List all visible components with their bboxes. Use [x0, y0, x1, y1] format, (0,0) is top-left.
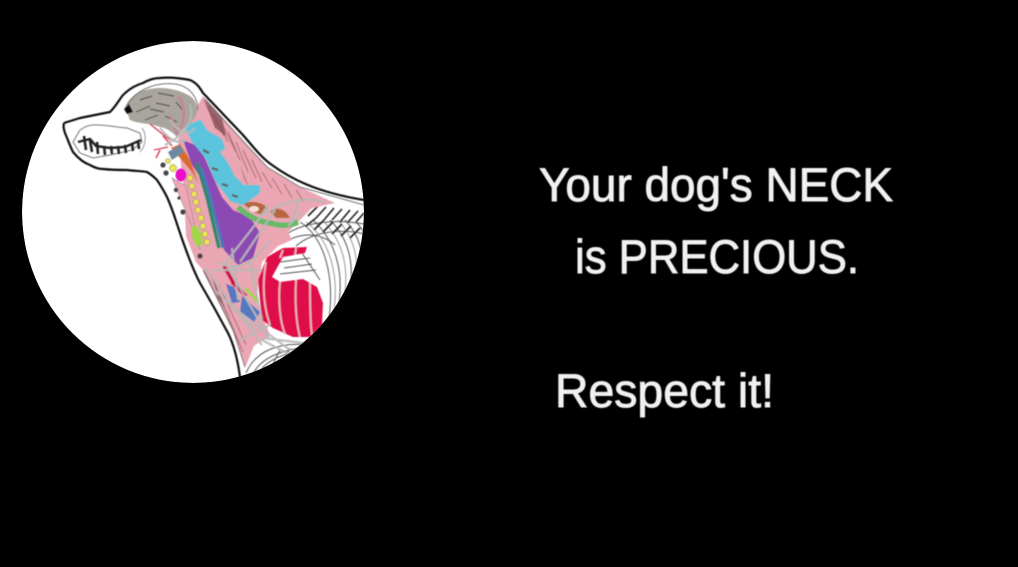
call to action: respect it: Respect it!	[555, 364, 774, 417]
purple muscle	[183, 140, 260, 265]
neck muscles	[178, 96, 335, 368]
dark nodes	[160, 162, 203, 259]
heading: neck is precious: is PRECIOUS.	[575, 230, 859, 283]
grey fascia strands	[160, 105, 325, 360]
inner outline	[127, 84, 364, 367]
brown muscle	[244, 202, 290, 218]
lime gland	[190, 225, 204, 247]
green nerve band	[238, 207, 298, 225]
orange muscle	[171, 144, 199, 185]
magenta gland	[176, 168, 186, 182]
illustration: dog neck anatomy in white circle	[22, 41, 368, 383]
heading: neck is precious	[539, 158, 893, 283]
red vessels	[150, 124, 172, 158]
red lung and heart muscle	[258, 247, 323, 337]
yellow oesophagus beads	[166, 159, 210, 245]
thoracic spines	[306, 206, 364, 238]
grey blue neck cartilage	[168, 145, 184, 160]
eye socket	[124, 104, 133, 114]
ribs and spine	[246, 220, 368, 373]
heading: neck is precious: Your dog's NECK	[539, 158, 893, 211]
skull	[73, 125, 145, 158]
cyan vertebrae	[187, 122, 258, 203]
muscle fibres	[204, 100, 304, 352]
dog body outline	[64, 78, 364, 377]
dark muscle shading	[205, 100, 250, 320]
brain	[125, 88, 197, 137]
green and blue trachea band	[197, 163, 219, 248]
pink oesophagus	[172, 178, 200, 250]
blue lower muscle	[226, 284, 260, 322]
